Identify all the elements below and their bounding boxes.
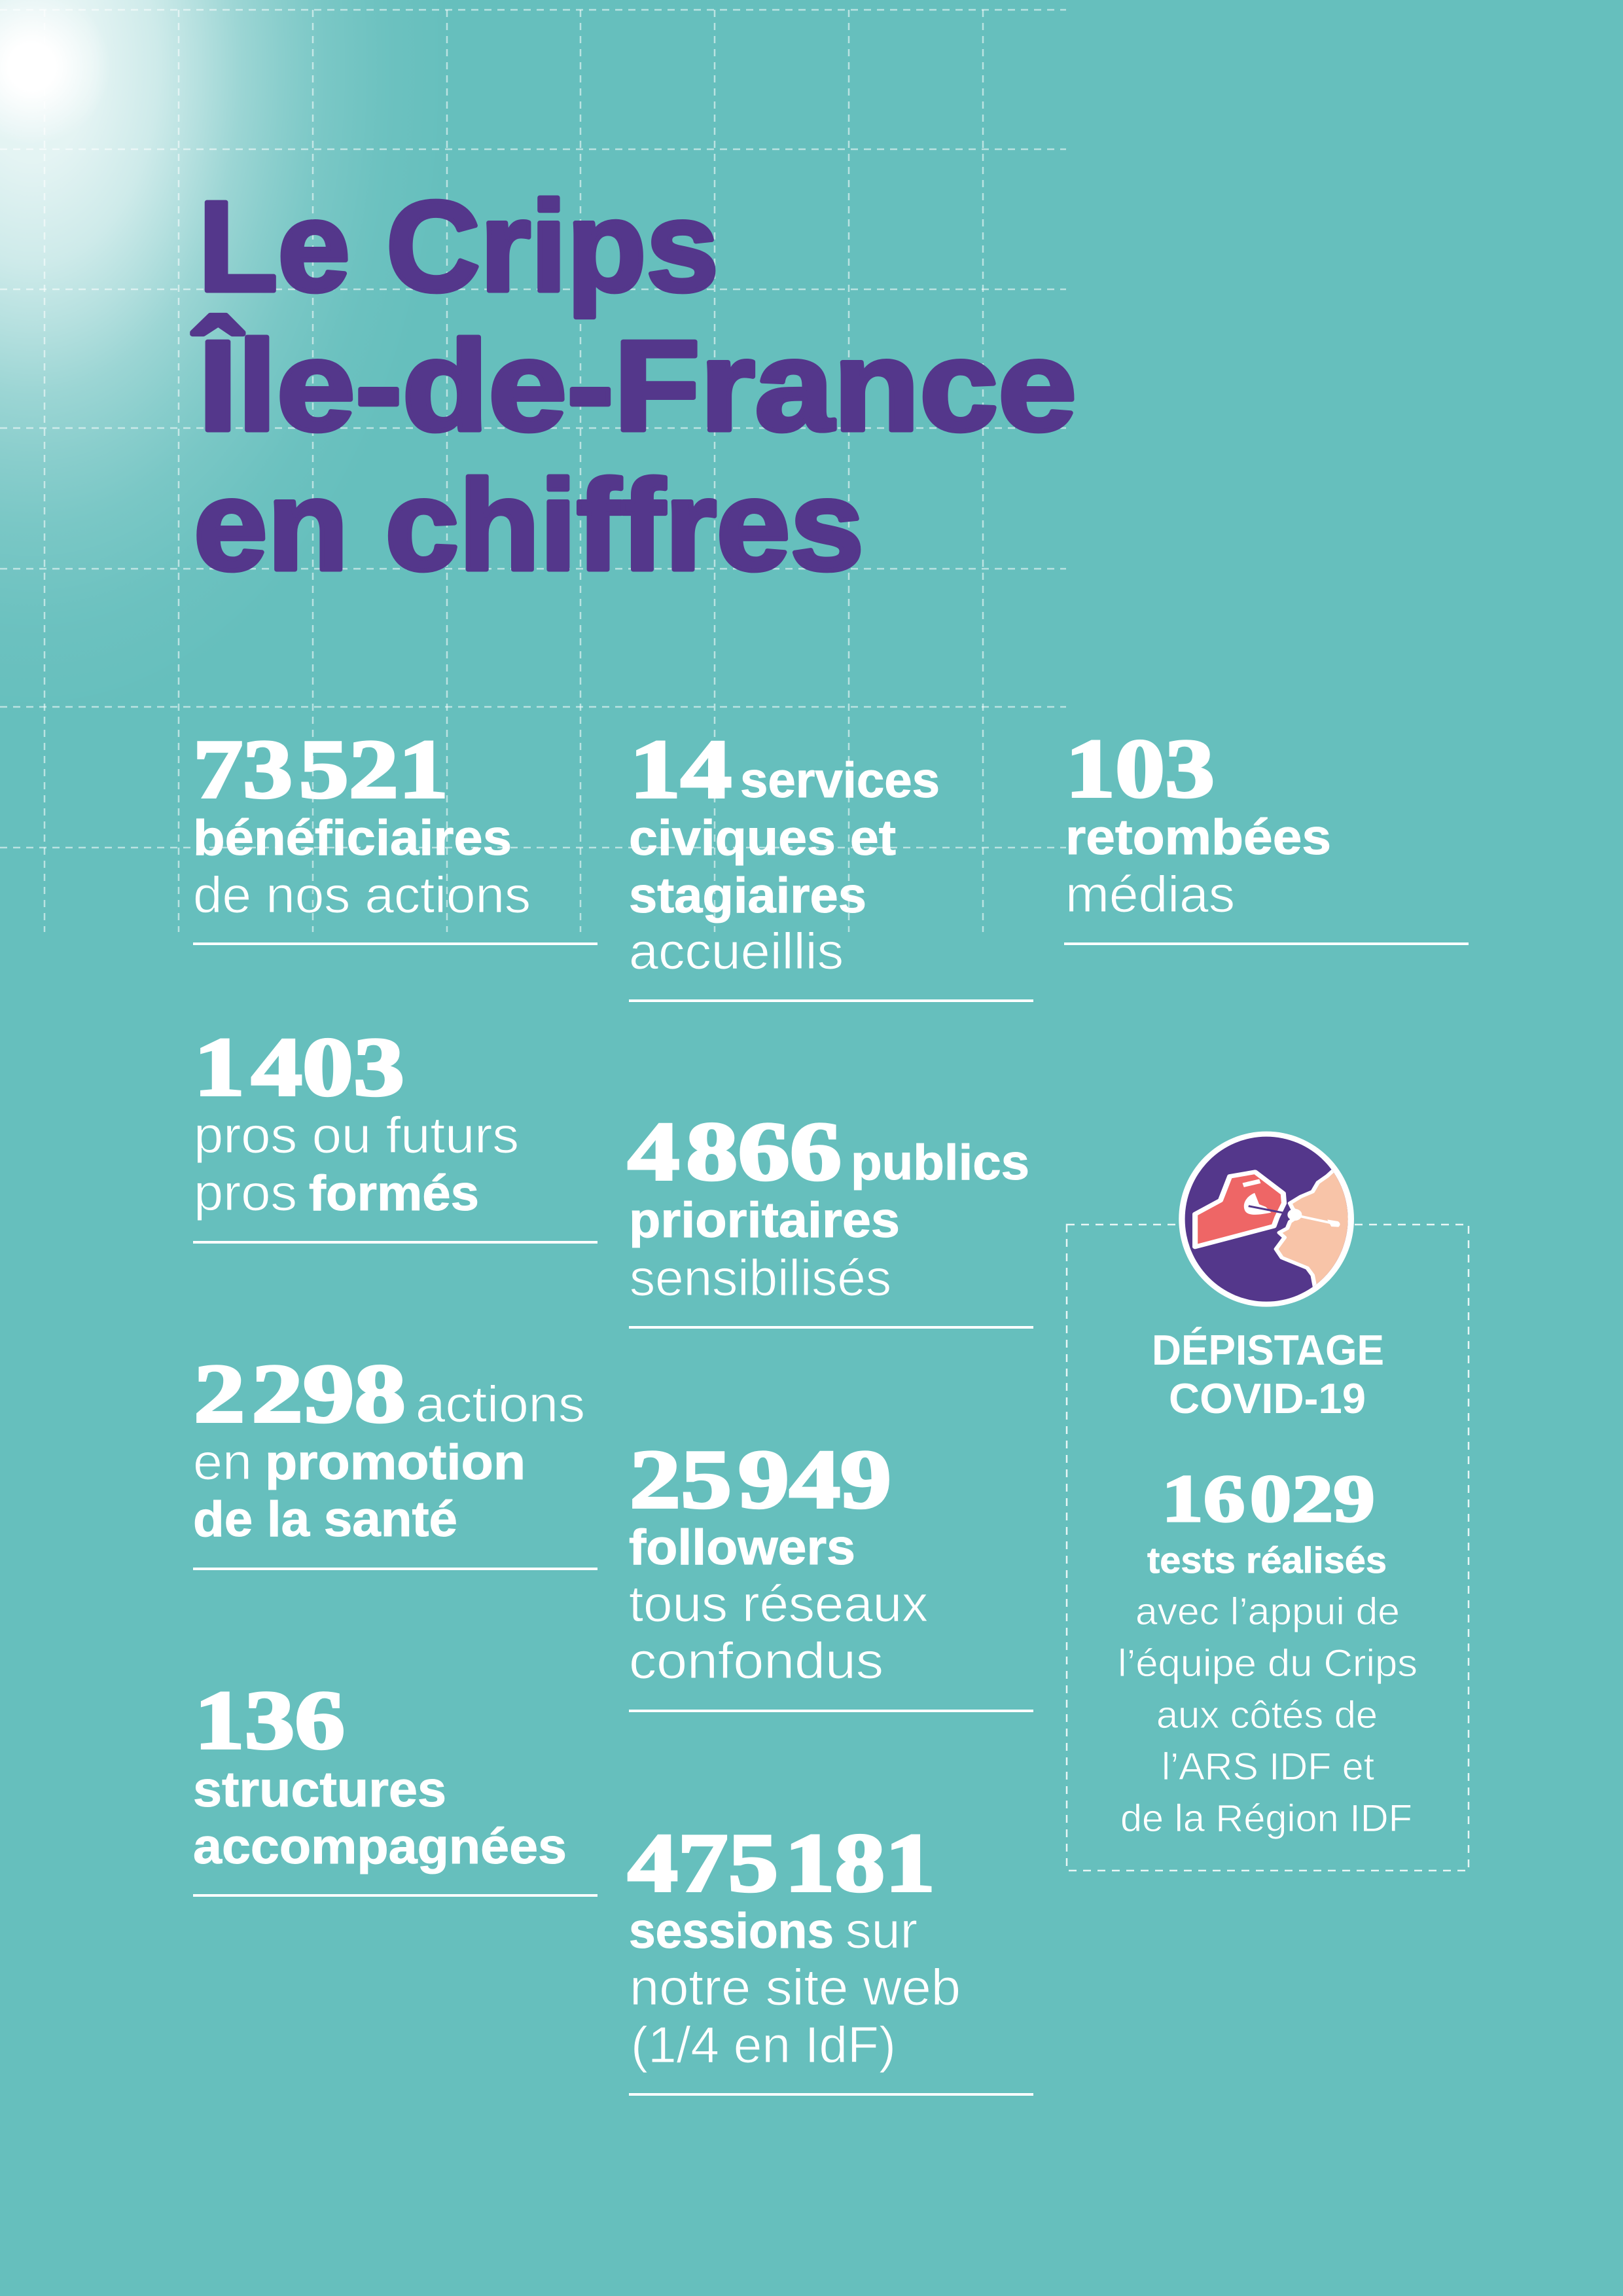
title: Le Crips xyxy=(198,175,719,318)
stat: 16 029 tests réalisés: l’ARS IDF et xyxy=(1162,1746,1374,1788)
stat: 475 181 sessions: sur xyxy=(846,1901,918,1959)
stat: 1 403 pros formés: 1 403 xyxy=(194,1020,404,1113)
stat: 16 029 tests réalisés: tests réalisés xyxy=(1147,1539,1387,1581)
title xyxy=(192,175,1077,597)
stat: 475 181 sessions: 475 181 xyxy=(628,1816,935,1909)
stat: 16 029 tests réalisés: 16 029 xyxy=(1162,1462,1375,1536)
stat: 25 949 followers: tous réseaux xyxy=(629,1575,928,1632)
icon: nasal swab test xyxy=(1179,1132,1359,1307)
stat: 73 521 bénéficiaires: de nos actions xyxy=(193,866,531,924)
stat: 4 866 publics: 4 866 xyxy=(628,1105,842,1198)
stat: 136 structures: accompagnées xyxy=(193,1819,567,1874)
stat: 475 181 sessions xyxy=(628,1816,1033,2096)
stat: 136 structures: structures xyxy=(193,1762,446,1818)
stat: 16 029 tests réalisés: l’équipe du Crips xyxy=(1118,1642,1418,1685)
stat: 14 services civiques: 14 xyxy=(630,723,732,816)
stat: 103 retombées médias: 103 xyxy=(1065,722,1215,815)
stat: 25 949 followers: confondus xyxy=(629,1632,883,1689)
stat: 475 181 sessions: (1/4 en IdF) xyxy=(631,2016,896,2073)
stat: 2 298 actions: 2 298 xyxy=(194,1347,406,1440)
stat: 73 521 bénéficiaires xyxy=(193,723,597,945)
stat: 1 403 pros formés: pros ou futurs xyxy=(194,1106,519,1164)
stat: 14 services civiques: stagiaires xyxy=(629,868,866,924)
stat: 16 029 tests réalisés: de la Région IDF xyxy=(1120,1797,1412,1840)
stat: 4 866 publics: sensibilisés xyxy=(630,1249,891,1306)
stat: 4 866 publics: prioritaires xyxy=(629,1193,900,1248)
stat: 1 403 pros formés: pros xyxy=(194,1164,297,1221)
title: en chiffres xyxy=(194,454,864,597)
stat: 16 029 tests réalisés: aux côtés de xyxy=(1156,1694,1378,1736)
stat: 4 866 publics xyxy=(628,1105,1033,1329)
stat: 2 298 actions xyxy=(193,1347,597,1570)
heading: dépistage covid-19: COVID-19 xyxy=(1169,1374,1366,1422)
stat: 475 181 sessions: sessions xyxy=(629,1903,834,1959)
stat: 14 services civiques: services xyxy=(740,753,940,808)
panel: dépistage covid-19 xyxy=(1067,1132,1469,1871)
stat: 16 029 tests réalisés: avec l’appui de xyxy=(1135,1590,1400,1633)
stat: 103 retombées médias: médias xyxy=(1065,865,1235,923)
title: Île-de-France xyxy=(192,314,1077,457)
stat: 73 521 bénéficiaires: bénéficiaires xyxy=(193,810,512,866)
stat: 136 structures: 136 xyxy=(194,1674,345,1767)
stat: 103 retombées médias xyxy=(1064,722,1469,945)
stat: 14 services civiques: civiques et xyxy=(629,810,896,866)
stat: 25 949 followers: followers xyxy=(629,1520,855,1575)
stat: 25 949 followers xyxy=(629,1433,1033,1712)
heading: dépistage covid-19 xyxy=(1152,1326,1384,1422)
stat: 475 181 sessions: notre site web xyxy=(630,1958,961,2016)
stat: 1 403 pros formés xyxy=(193,1020,597,1244)
stat: 1 403 pros formés: formés xyxy=(309,1166,479,1221)
stat: 136 structures xyxy=(193,1674,597,1897)
stat: 14 services civiques xyxy=(629,723,1033,1002)
stat: 103 retombées médias: retombées xyxy=(1065,810,1331,865)
stat: 2 298 actions: promotion xyxy=(265,1435,526,1490)
stat: 4 866 publics: publics xyxy=(851,1135,1029,1191)
stat: 25 949 followers: 25 949 xyxy=(630,1433,891,1526)
stat: 14 services civiques: accueillis xyxy=(629,922,844,980)
stat: 16 029 tests réalisés xyxy=(1118,1462,1418,1840)
stat: 2 298 actions: en xyxy=(193,1433,252,1490)
heading: dépistage covid-19: DÉPISTAGE xyxy=(1152,1326,1384,1374)
stat: 73 521 bénéficiaires: 73 521 xyxy=(193,723,448,816)
stat: 2 298 actions: actions xyxy=(416,1375,585,1433)
stat: 2 298 actions: de la santé xyxy=(193,1492,457,1547)
